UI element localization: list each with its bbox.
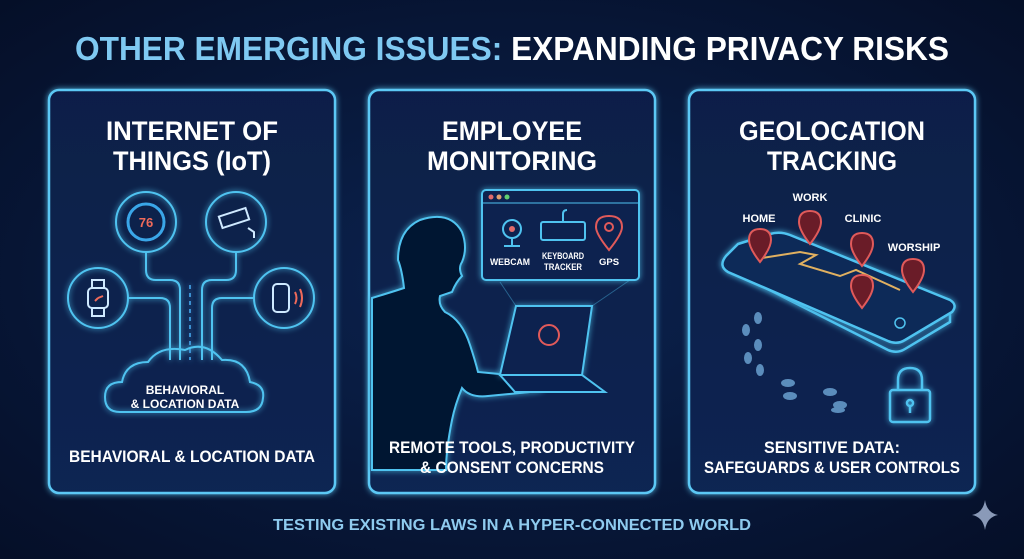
icon: sparkle bbox=[972, 500, 998, 530]
pin labels: CLINIC bbox=[845, 213, 881, 225]
illustration: monitoring window: KEYBOARD bbox=[542, 251, 584, 262]
caption: employee monitoring bbox=[389, 438, 636, 477]
caption: geolocation: SENSITIVE DATA: bbox=[764, 438, 900, 457]
pin labels bbox=[742, 192, 940, 254]
illustration: phone with map bbox=[722, 233, 955, 352]
panel: internet of things bbox=[49, 90, 335, 493]
diagram: iot devices to cloud bbox=[68, 192, 314, 412]
map pins bbox=[749, 211, 924, 308]
illustration: monitoring window bbox=[482, 190, 639, 280]
heading: internet of things: INTERNET OF bbox=[106, 116, 278, 146]
heading: geolocation tracking: GEOLOCATION bbox=[739, 116, 925, 146]
icon: gps pin bbox=[596, 216, 622, 250]
heading: internet of things: THINGS (IoT) bbox=[113, 146, 271, 176]
icon: watch bbox=[88, 280, 108, 316]
heading: employee monitoring bbox=[427, 116, 597, 176]
illustration: laptop bbox=[500, 280, 630, 392]
pin labels: WORSHIP bbox=[888, 242, 940, 254]
pin labels: HOME bbox=[742, 213, 776, 225]
illustration: person silhouette bbox=[372, 217, 548, 470]
icon: thermostat bbox=[128, 204, 164, 240]
illustration: monitoring window: WEBCAM bbox=[490, 257, 530, 268]
icon: thermostat: 76 bbox=[139, 215, 153, 230]
cloud text: & LOCATION DATA bbox=[131, 397, 240, 411]
icon: footprints bbox=[742, 312, 847, 413]
caption: employee monitoring: REMOTE TOOLS, PRODUCTIVITY bbox=[389, 438, 636, 457]
cloud text: BEHAVIORAL bbox=[146, 383, 224, 397]
illustration: monitoring window: TRACKER bbox=[544, 262, 582, 273]
heading: internet of things bbox=[106, 116, 278, 176]
caption: geolocation bbox=[704, 438, 960, 477]
cloud text bbox=[131, 383, 240, 411]
icon: padlock bbox=[890, 368, 930, 422]
pin labels: WORK bbox=[793, 192, 827, 204]
footer: TESTING EXISTING LAWS IN A HYPER-CONNECTED WORLD bbox=[273, 517, 751, 534]
heading: geolocation tracking bbox=[739, 116, 925, 176]
icon: webcam bbox=[503, 220, 521, 246]
icon: keyboard bbox=[541, 210, 585, 240]
icon: camera bbox=[219, 208, 254, 238]
caption: geolocation: SAFEGUARDS & USER CONTROLS bbox=[704, 458, 960, 477]
panel: geolocation tracking bbox=[689, 90, 975, 493]
heading: employee monitoring: EMPLOYEE bbox=[442, 116, 582, 146]
title: OTHER EMERGING ISSUES: EXPANDING PRIVACY RISKS bbox=[75, 30, 949, 67]
panel: employee monitoring bbox=[369, 90, 655, 493]
heading: employee monitoring: MONITORING bbox=[427, 146, 597, 176]
illustration: monitoring window: GPS bbox=[599, 257, 619, 268]
caption: iot: BEHAVIORAL & LOCATION DATA bbox=[69, 447, 315, 466]
caption: employee monitoring: & CONSENT CONCERNS bbox=[420, 458, 604, 477]
heading: geolocation tracking: TRACKING bbox=[767, 146, 897, 176]
icon: smart speaker bbox=[273, 284, 302, 312]
